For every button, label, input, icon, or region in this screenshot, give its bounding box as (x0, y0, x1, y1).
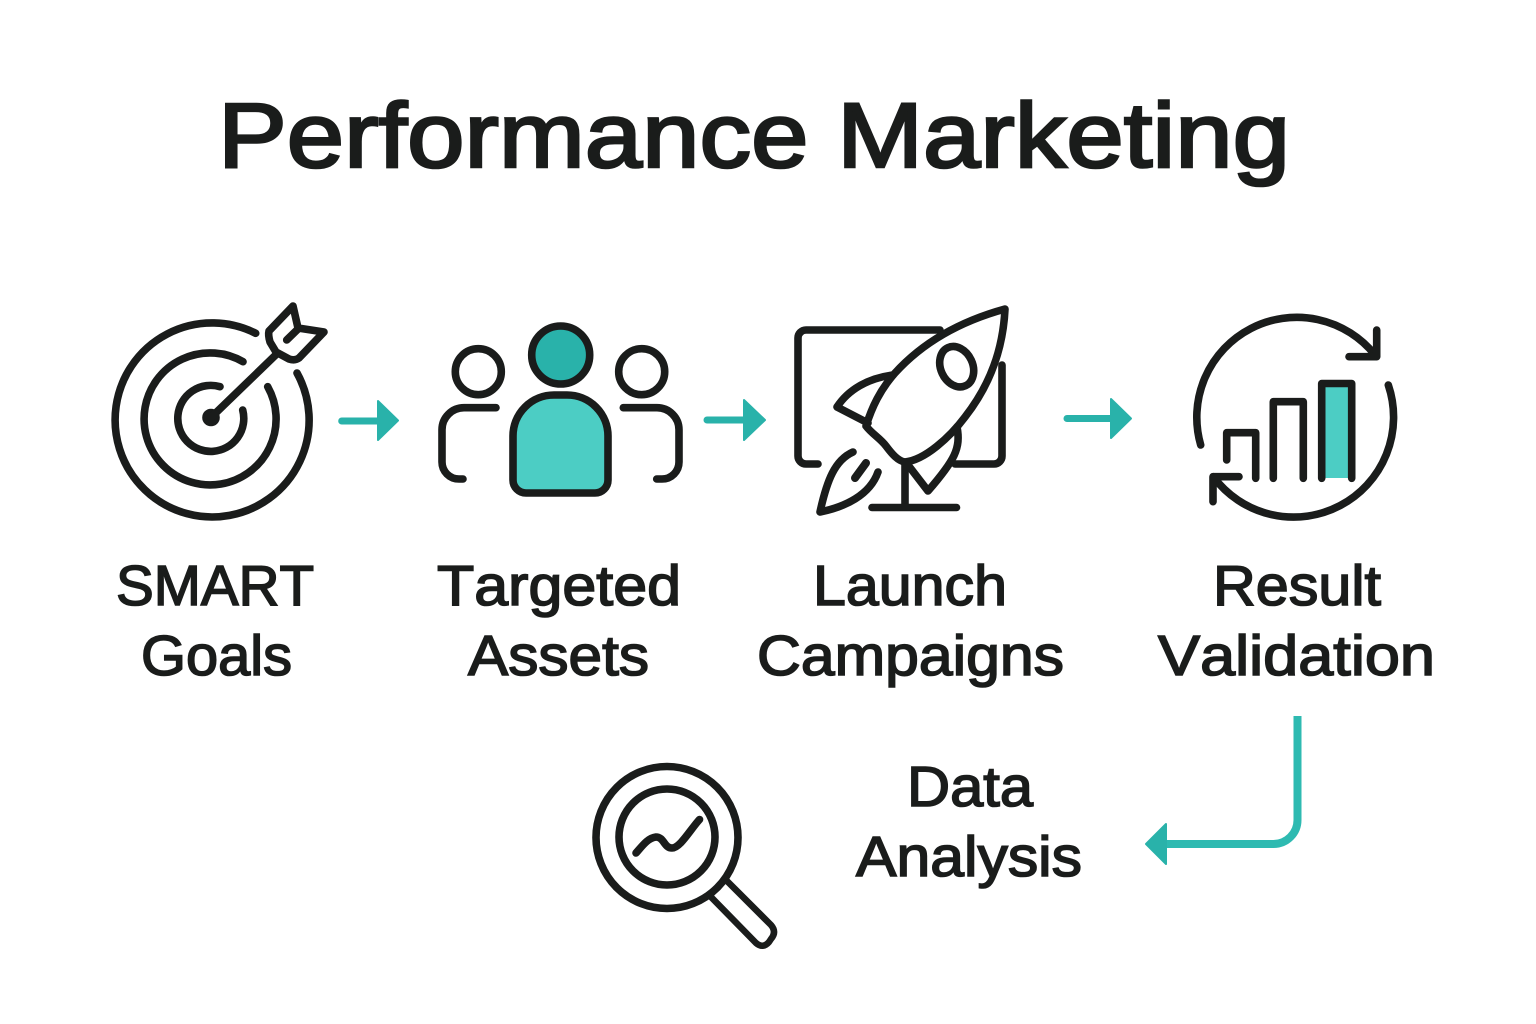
panel: Launch Campaigns (757, 309, 1064, 688)
label: Targeted Assets (437, 554, 681, 688)
panel: SMART Goals (115, 306, 324, 688)
label: Launch Campaigns: Campaigns (757, 624, 1064, 688)
label: SMART Goals: Goals (141, 624, 292, 688)
label: SMART Goals (116, 554, 314, 688)
icon: bar chart with cycle arrows (1197, 317, 1394, 517)
panel: Data Analysis (596, 755, 1082, 946)
panel: Result Validation (1158, 317, 1435, 688)
arrow: assets to campaigns (707, 400, 765, 440)
label: Data Analysis: Data (907, 755, 1033, 819)
icon: audience group (442, 326, 679, 493)
label: Result Validation: Result (1213, 554, 1381, 618)
label: Result Validation: Validation (1158, 624, 1435, 688)
label: Launch Campaigns: Launch (813, 554, 1007, 618)
label: Data Analysis: Analysis (856, 825, 1082, 889)
arrow: goals to assets (342, 401, 398, 440)
arrow: validation to data analysis (1146, 716, 1298, 864)
title: Performance Marketing (218, 85, 1290, 187)
panel: Targeted Assets (437, 326, 681, 688)
icon: target with arrow (115, 306, 324, 517)
label: Targeted Assets: Assets (468, 624, 649, 688)
label: Targeted Assets: Targeted (437, 554, 681, 618)
icon: rocket and monitor (798, 309, 1005, 512)
icon: magnifying glass with trend line (596, 766, 774, 946)
label: Result Validation (1158, 554, 1435, 688)
arrow: campaigns to validation (1067, 399, 1131, 438)
label: Launch Campaigns (757, 554, 1064, 688)
label: Data Analysis (856, 755, 1082, 889)
label: SMART Goals: SMART (116, 554, 314, 618)
